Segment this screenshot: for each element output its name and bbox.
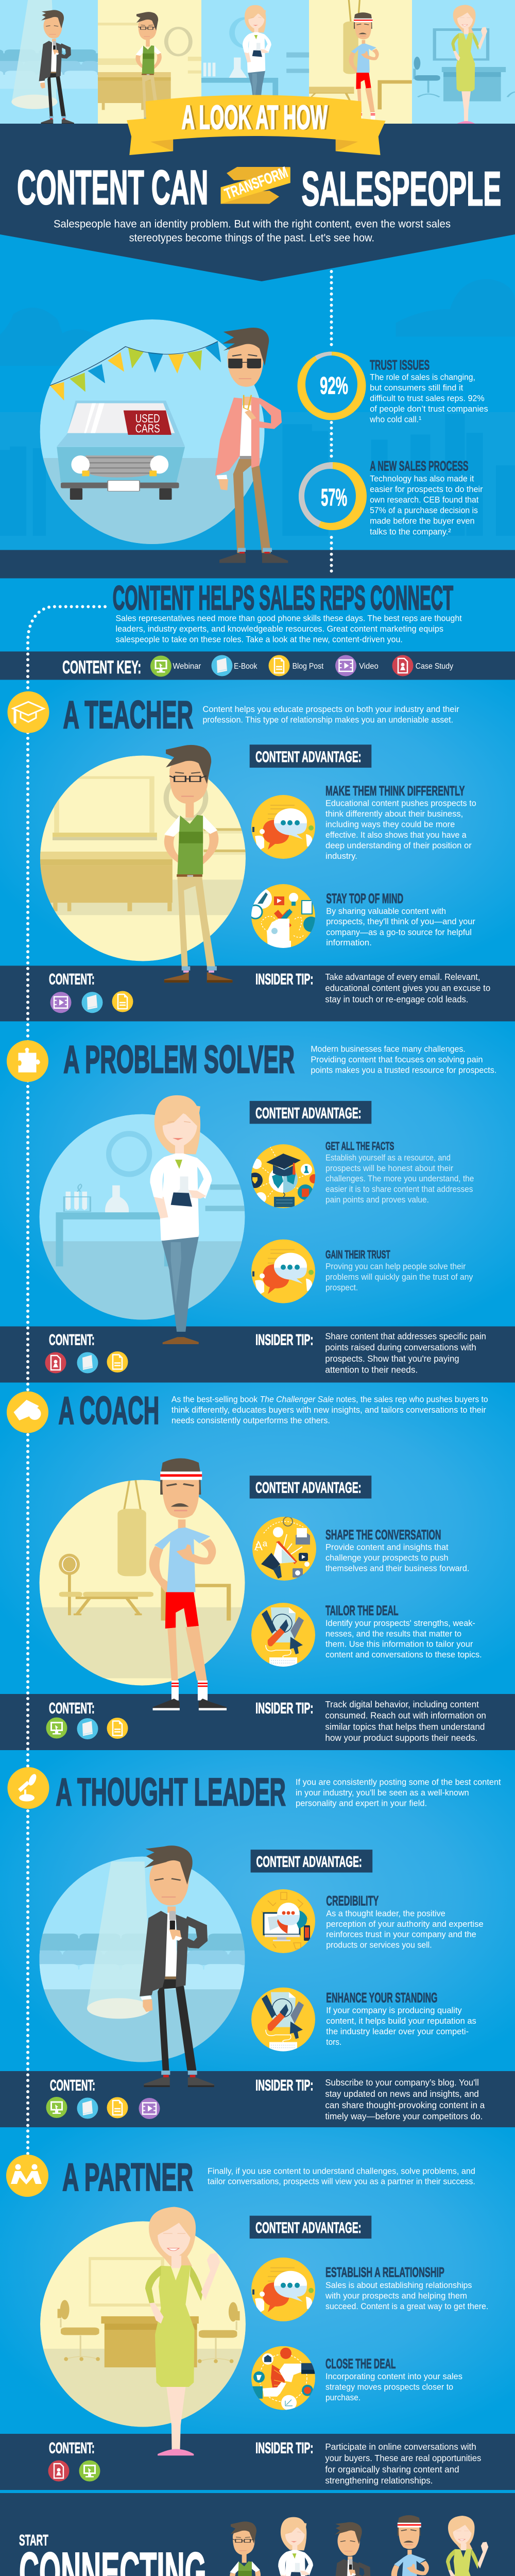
content key: E-Book xyxy=(234,662,257,671)
bar: content and insider tip xyxy=(45,1331,486,1375)
dotted connector line xyxy=(28,272,332,2155)
character: coach, closing xyxy=(391,2515,435,2576)
closing title: START xyxy=(19,2532,48,2549)
bar: content and insider tip: INSIDER TIP: xyxy=(255,2439,313,2456)
bar: content and insider tip: INSIDER TIP: xyxy=(255,1331,313,1348)
bar: content and insider tip: INSIDER TIP: xyxy=(255,2077,313,2094)
content advantage label xyxy=(250,2216,371,2239)
character: thought leader, closing xyxy=(332,2522,374,2576)
icon: megaphone xyxy=(252,1517,316,1581)
content key: Blog Post xyxy=(293,662,323,671)
icon: pen tool xyxy=(251,1603,315,1669)
hero panels with stereotype characters xyxy=(0,0,515,124)
character: teacher xyxy=(164,745,233,982)
character: partner, closing xyxy=(446,2516,488,2576)
icon: microphone xyxy=(7,1767,49,1809)
character: thought leader, hero xyxy=(39,10,74,124)
heading: content helps sales reps connect xyxy=(113,579,462,645)
content key: CONTENT KEY: xyxy=(62,657,141,677)
character: partner, hero xyxy=(451,5,487,124)
text: make them think differently: industry. xyxy=(325,851,357,861)
text: credibility: CREDIBILITY xyxy=(326,1893,379,1908)
bar: content and insider tip: CONTENT: xyxy=(49,2439,95,2456)
icon: conversation xyxy=(251,1240,315,1303)
closing title xyxy=(19,2532,207,2576)
character: scientist xyxy=(150,1095,212,1344)
text: make them think differently xyxy=(325,784,476,861)
bar: content and insider tip xyxy=(48,2439,481,2486)
bar: content and insider tip: attention to their needs. xyxy=(325,1365,418,1375)
heading: A PARTNER xyxy=(62,2155,193,2198)
stat: 57 percent xyxy=(299,458,483,536)
text: stay top of mind: information. xyxy=(326,938,372,947)
text: enhance your standing: tors. xyxy=(326,2037,341,2047)
panel: a partner xyxy=(6,2155,488,2486)
icon: conversation xyxy=(251,795,315,859)
icon: puzzle piece xyxy=(7,1040,48,1082)
illustration: classroom scene xyxy=(33,755,251,961)
text: gain their trust xyxy=(325,1248,473,1292)
character: coach xyxy=(149,1458,227,1710)
bars xyxy=(0,550,515,2490)
text: close the deal: purchase. xyxy=(325,2393,360,2402)
bar: content and insider tip: CONTENT: xyxy=(50,2077,95,2094)
illustration: gym scene xyxy=(36,1479,250,1686)
character: used car salesman xyxy=(215,328,282,553)
character legs: used car salesman xyxy=(219,548,288,563)
panel: a teacher xyxy=(7,691,490,1013)
illustration: office scene xyxy=(36,2222,250,2429)
illustration: laboratory scene xyxy=(36,1114,250,1323)
title: content can transform salespeople: TRANSFORM xyxy=(222,164,290,203)
text: gain their trust: prospect. xyxy=(325,1283,358,1292)
content key: Video xyxy=(359,662,379,671)
heading: A TEACHER xyxy=(63,693,193,736)
character: partner xyxy=(145,2207,220,2455)
icon: money and handshake xyxy=(251,2346,315,2411)
content key: Webinar xyxy=(173,662,201,671)
content advantage label xyxy=(251,1850,372,1873)
illustration: auditorium scene xyxy=(33,1857,250,2069)
bar: content and insider tip: INSIDER TIP: xyxy=(255,1700,313,1717)
character: coach, hero xyxy=(349,12,384,126)
text: establish a relationship xyxy=(325,2265,488,2311)
content advantage label xyxy=(250,1476,371,1499)
text: Case Study xyxy=(416,662,453,671)
icon: whistle xyxy=(7,1391,48,1433)
text: get all the facts xyxy=(325,1140,474,1205)
bar: content and insider tip: CONTENT: xyxy=(49,971,95,988)
text: tailor the deal xyxy=(325,1603,482,1659)
illustration: used car lot: CARS xyxy=(135,422,160,435)
bar: content and insider tip xyxy=(46,1699,486,1743)
intro text xyxy=(54,218,451,244)
illustration: used car lot: USED xyxy=(135,412,160,425)
character: problem solver, closing xyxy=(278,2517,313,2576)
content advantage label xyxy=(250,1101,371,1124)
bar: content and insider tip: CONTENT: xyxy=(49,1700,95,1717)
ribbon: a look at how xyxy=(127,95,386,155)
bar: content and insider tip xyxy=(49,971,490,1013)
text: stay top of mind xyxy=(326,891,475,947)
stat: 92 percent: who cold call.¹ xyxy=(370,415,421,425)
character: problem solver, hero xyxy=(243,5,271,121)
panel: a coach xyxy=(7,1388,488,1743)
panel: a thought leader xyxy=(7,1767,501,2122)
icon: graduation and globe xyxy=(247,1144,319,1208)
bar: content and insider tip: CONTENT: xyxy=(49,1331,95,1348)
icon: monitor and speech bubble xyxy=(251,1889,315,1953)
stat: 92 percent xyxy=(298,351,488,425)
text: credibility xyxy=(326,1893,484,1950)
text: shape the conversation xyxy=(325,1527,469,1573)
stat: 57 percent: 57% xyxy=(321,484,347,511)
character: teacher, hero xyxy=(135,12,168,126)
content advantage label xyxy=(250,744,371,768)
title panel xyxy=(0,124,515,281)
bar: content and insider tip xyxy=(46,2077,485,2122)
icon: graduation cap xyxy=(7,691,49,733)
text: close the deal xyxy=(325,2356,462,2402)
character: thought leader xyxy=(140,1845,214,2087)
content key xyxy=(62,655,453,677)
icon: conversation xyxy=(251,2258,315,2321)
text: enhance your standing xyxy=(326,1990,476,2047)
character: teacher, closing xyxy=(230,2521,268,2576)
heading: needs consistently outperforms the others. xyxy=(171,1416,330,1426)
icon: ideas in mind xyxy=(249,884,319,948)
panel: a problem solver xyxy=(7,1038,496,1375)
icon: pen tool xyxy=(251,1988,315,2054)
icon: two people shaking hands xyxy=(6,2155,48,2197)
illustration: used car lot xyxy=(36,319,273,551)
stat: 92 percent: 92% xyxy=(320,372,348,399)
bar: content and insider tip: INSIDER TIP: xyxy=(255,971,313,988)
heading: A COACH xyxy=(59,1388,159,1432)
